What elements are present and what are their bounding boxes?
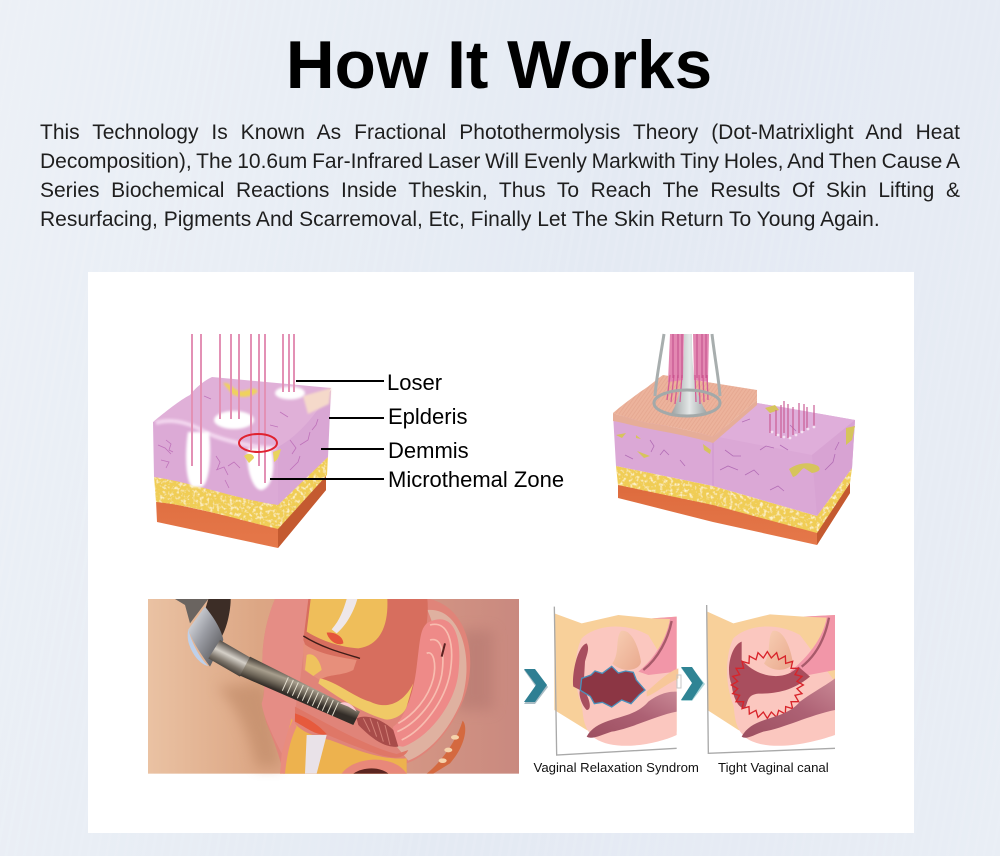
caption: tight: Tight Vaginal canal bbox=[718, 760, 829, 775]
bladder wall bbox=[303, 599, 428, 719]
vessels bbox=[158, 396, 318, 488]
arrow: second chevron bbox=[677, 667, 705, 701]
labels bbox=[387, 370, 564, 492]
laser beams bbox=[192, 334, 294, 484]
shadow on skin bbox=[217, 683, 280, 767]
illustration: left skin block with labels bbox=[153, 334, 564, 548]
frame bbox=[554, 607, 677, 755]
illustration: right skin block with handpiece bbox=[613, 334, 855, 545]
uterus folds bbox=[392, 619, 459, 747]
laser probe bbox=[175, 599, 360, 725]
skin block layers bbox=[153, 334, 331, 548]
diagram: tight canal bbox=[707, 605, 835, 753]
coccyx bbox=[427, 721, 465, 774]
text block: description: Series Biochemical Reactions Inside Theskin, Thus To Reach The Results Of Skin Lifting & bbox=[40, 179, 960, 202]
outer tissue bbox=[262, 599, 470, 774]
yellow fat bbox=[307, 599, 387, 648]
yellow patches bbox=[616, 405, 855, 477]
photo: laser probe anatomy bbox=[148, 599, 519, 774]
lower wall bbox=[295, 707, 408, 758]
skin layers bbox=[618, 481, 850, 545]
labels: Eplderis bbox=[388, 404, 467, 429]
title: How It Works bbox=[286, 28, 712, 103]
grey band around uterus bbox=[397, 610, 467, 761]
handpiece and beams bbox=[654, 334, 720, 417]
text block: description: This Technology Is Known As Fractional Photothermolysis Theory (Dot-Matrixlight And Heat bbox=[40, 121, 960, 144]
lower yellow and ligament bbox=[280, 718, 407, 774]
vessels bbox=[625, 419, 839, 491]
laser dot matrix bbox=[770, 401, 814, 438]
dark folds bbox=[357, 717, 398, 747]
mid layer bbox=[303, 643, 357, 680]
caption: relaxation: Vaginal Relaxation Syndrom bbox=[534, 760, 699, 775]
text block: description: Resurfacing, Pigments And Scarremoval, Etc, Finally Let The Skin Return To Young Again. bbox=[40, 208, 880, 231]
text block: description bbox=[40, 121, 960, 231]
peach treated patch bbox=[613, 375, 757, 437]
labels: Demmis bbox=[388, 438, 469, 463]
text block: description: Decomposition), The 10.6um Far-Infrared Laser Will Evenly Markwith Tiny Holes, And Then Cause A bbox=[40, 150, 960, 173]
diagram: vaginal relaxation bbox=[554, 607, 678, 755]
slit bbox=[303, 636, 360, 658]
channels bbox=[186, 386, 305, 490]
panel: white illustration panel bbox=[88, 272, 914, 833]
labels: Microthemal Zone bbox=[388, 467, 564, 492]
frame bbox=[707, 605, 835, 753]
red target ring bbox=[239, 434, 277, 452]
labels: Loser bbox=[387, 370, 442, 395]
callout lines bbox=[270, 381, 384, 479]
arrow: first chevron bbox=[524, 669, 548, 704]
